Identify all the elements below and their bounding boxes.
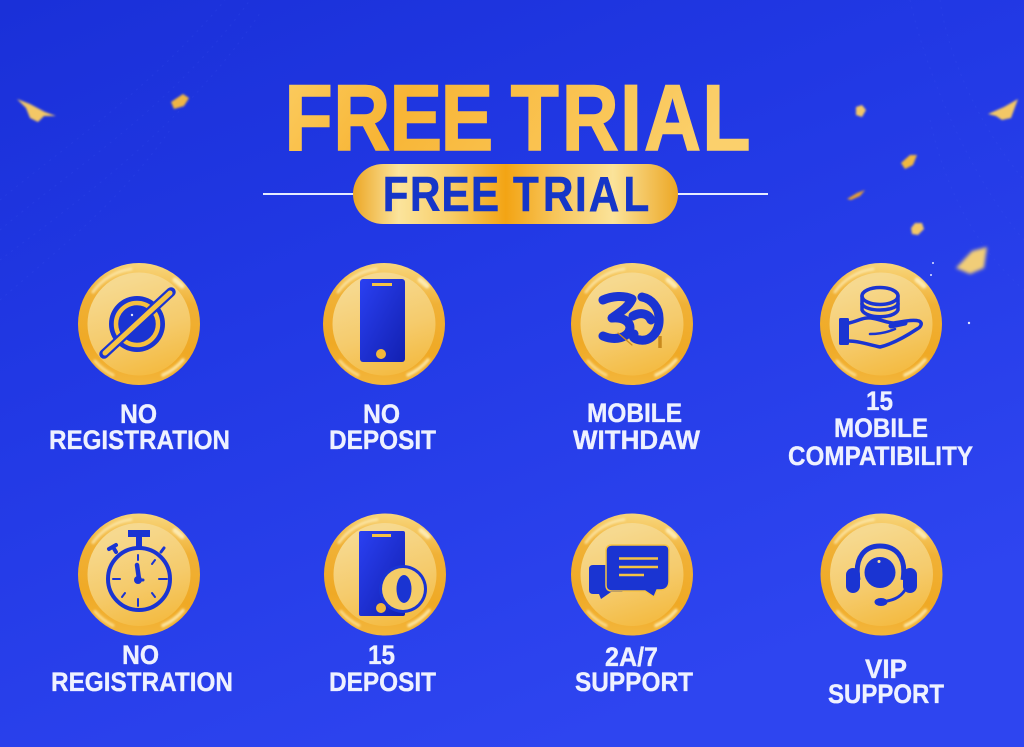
icon: phone with coin xyxy=(359,531,427,616)
label: REGISTRATION xyxy=(51,667,233,697)
label xyxy=(575,642,693,697)
item: mobile compatibility xyxy=(788,263,973,471)
label xyxy=(49,399,230,455)
label xyxy=(329,640,436,697)
icon: headset xyxy=(846,546,917,606)
label: 15 xyxy=(866,386,893,416)
label: MOBILE xyxy=(834,413,928,443)
label xyxy=(329,399,436,455)
icon: crossed-out circle xyxy=(104,292,171,354)
label: NO xyxy=(363,399,400,429)
label: WITHDAW xyxy=(573,425,700,455)
label: COMPATIBILITY xyxy=(788,441,973,471)
item: 15 deposit xyxy=(324,514,446,697)
label xyxy=(51,640,233,697)
label: REGISTRATION xyxy=(49,425,230,455)
label: SUPPORT xyxy=(828,679,944,709)
label: 2A/7 xyxy=(605,642,658,672)
label: MOBILE xyxy=(587,398,682,428)
item: no deposit xyxy=(323,263,445,455)
subtitle banner xyxy=(263,164,768,224)
item: vip support xyxy=(820,514,944,709)
subtitle banner: FREE TRIAL xyxy=(383,167,649,222)
icon: phone xyxy=(360,279,405,362)
label: 15 xyxy=(368,640,395,670)
label: NO xyxy=(122,640,159,670)
icon: stylised 33 xyxy=(603,296,660,348)
item: 24/7 support xyxy=(571,514,693,697)
label: DEPOSIT xyxy=(329,667,436,697)
item: mobile withdraw xyxy=(571,263,700,455)
label: NO xyxy=(120,399,157,429)
title: FREE TRIAL xyxy=(285,66,750,171)
icon: stopwatch xyxy=(108,530,170,610)
gold particles xyxy=(17,94,1018,324)
item: no registration stopwatch xyxy=(51,514,233,697)
label: DEPOSIT xyxy=(329,425,436,455)
item: no registration xyxy=(49,263,230,455)
icon: chat bubbles xyxy=(589,545,669,599)
icon: hand holding coins xyxy=(839,288,921,347)
label xyxy=(573,398,700,455)
label xyxy=(828,654,944,709)
label: VIP xyxy=(865,654,907,684)
label xyxy=(788,386,973,471)
label: SUPPORT xyxy=(575,667,693,697)
